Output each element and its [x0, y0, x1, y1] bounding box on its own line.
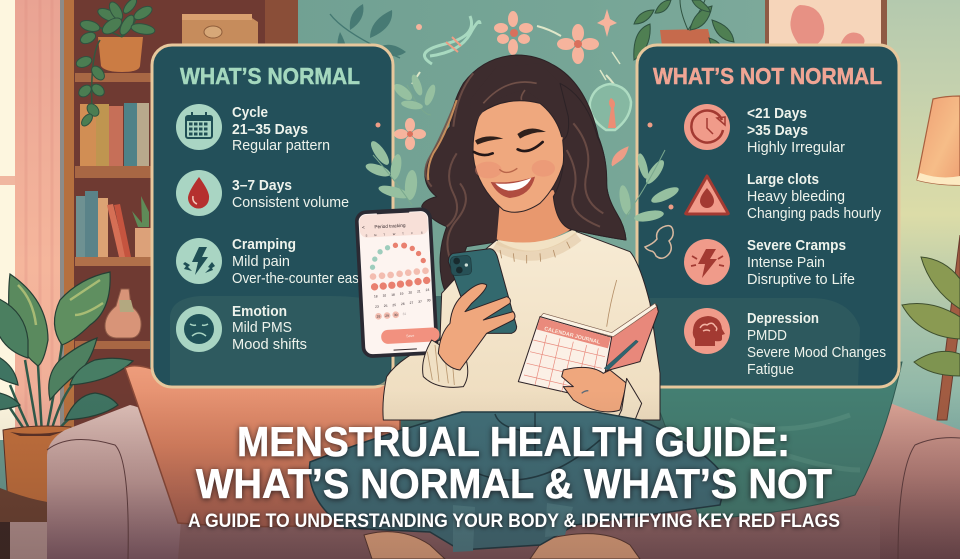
sofa	[47, 296, 960, 559]
calendar day numbers: 26	[401, 302, 405, 306]
item: depression: Fatigue	[747, 362, 794, 378]
woman	[356, 55, 660, 420]
item: short or long cycle: >35 Days	[747, 123, 808, 139]
item: depression	[684, 308, 886, 378]
wall decorations: top plant and framed picture	[634, 0, 887, 60]
uterus outline doodle	[645, 226, 673, 258]
phone with tracking app: T	[402, 232, 404, 236]
item: emotion: Mild PMS	[232, 320, 292, 336]
DNA helix	[424, 16, 480, 64]
lamp	[917, 96, 960, 420]
item: short or long cycle	[684, 104, 845, 156]
bottom darkening behind title	[0, 390, 960, 559]
right side plant	[902, 257, 960, 376]
wall botanical doodles	[330, 4, 631, 166]
closed eyes	[474, 142, 543, 155]
calendar day numbers: 25	[392, 303, 396, 307]
item: cramping: Mild pain	[232, 254, 290, 270]
flowers	[394, 9, 617, 150]
item: period length: Consistent volume	[232, 195, 349, 211]
right sprig over panel	[617, 150, 681, 224]
calendar day numbers: 27	[410, 301, 414, 305]
item: cycle	[176, 104, 330, 154]
icon: clock	[684, 104, 730, 150]
phone with tracking app: F	[411, 231, 414, 235]
top pot plant	[634, 0, 734, 60]
orange cushion	[125, 366, 400, 527]
vase	[105, 289, 141, 338]
item: cycle: Cycle	[232, 105, 268, 121]
subtitle: A GUIDE TO UNDERSTANDING YOUR BODY & IDENTIFYING KEY RED FLAGS	[188, 511, 840, 532]
phone with tracking app: M	[374, 233, 377, 237]
icon: blood drop	[176, 170, 222, 216]
item: severe cramps: Severe Cramps	[747, 238, 846, 254]
item: emotion: Mood shifts	[232, 337, 307, 353]
sweater collar	[495, 229, 577, 252]
calendar day numbers: 29	[385, 314, 389, 318]
item: cycle: Regular pattern	[232, 138, 330, 154]
icon: warning triangle with drop	[686, 176, 728, 214]
title	[196, 418, 832, 507]
calendar day numbers: 25	[384, 304, 388, 308]
nose	[499, 168, 517, 172]
icon: lightning	[176, 238, 222, 284]
title: MENSTRUAL HEALTH GUIDE:	[237, 418, 790, 465]
sofa back	[150, 296, 876, 540]
item: depression: Depression	[747, 311, 819, 327]
panel: what's not normal	[637, 45, 899, 387]
left sprig	[391, 73, 438, 115]
phone with tracking app: T	[383, 233, 386, 237]
calendar day numbers: 29	[377, 315, 381, 319]
phone held in hand	[448, 249, 517, 333]
item: emotion	[176, 304, 307, 353]
item: cramping: Cramping	[232, 237, 296, 253]
calendar day numbers: 20	[408, 291, 412, 295]
crossed legs	[309, 412, 726, 550]
leaves	[0, 272, 133, 420]
item: period length: 3–7 Days	[232, 178, 292, 194]
neck	[497, 190, 570, 245]
calendar day numbers: 19	[400, 292, 404, 296]
item: heavy bleeding: Large clots	[747, 172, 819, 188]
small arrow doodle	[612, 147, 628, 166]
item: heavy bleeding: Changing pads hourly	[747, 206, 882, 222]
panel edge doodles: sprigs, dots and uterus outline	[364, 122, 681, 258]
phone with tracking app: S	[365, 233, 368, 238]
calendar day numbers: 23	[375, 305, 379, 309]
phone with tracking app: W	[393, 232, 396, 236]
sofa left arm	[47, 405, 185, 559]
icon: bolt	[684, 239, 730, 285]
calendar ring of days	[369, 241, 426, 270]
feet	[364, 532, 640, 559]
calendar day numbers: 30	[394, 313, 398, 317]
phone with tracking app: Save	[406, 334, 414, 338]
item: severe cramps	[684, 238, 855, 288]
terracotta pot	[3, 426, 71, 505]
panel: what's normal	[152, 45, 393, 387]
left plant	[0, 272, 133, 559]
sofa seat	[120, 506, 880, 559]
top leaf sprig	[330, 4, 406, 64]
heading: what's not normal: WHAT’S NOT NORMAL	[653, 63, 882, 89]
jean cuffs	[453, 503, 573, 552]
small shelf plant	[132, 196, 151, 257]
item: short or long cycle: <21 Days	[747, 106, 807, 122]
item: cramping: Over-the-counter eas	[232, 271, 359, 287]
hair front fringe	[470, 63, 573, 140]
item: cycle: 21–35 Days	[232, 122, 308, 138]
stems	[8, 345, 75, 435]
hair strands	[425, 67, 575, 267]
calendar day numbers: 18	[391, 293, 395, 297]
lightbulb doodle	[590, 52, 631, 130]
hair right side falling over shoulder	[553, 83, 626, 240]
phone with tracking app: Period tracking	[374, 223, 406, 229]
side table	[0, 488, 70, 522]
books: middle shelf	[76, 191, 131, 257]
teal cushion	[650, 362, 902, 520]
spark lines	[412, 26, 618, 91]
calendar day numbers: 18	[374, 294, 378, 299]
calendar journal	[518, 303, 658, 400]
calendar journal: CALENDAR JOURNAL	[544, 326, 601, 346]
phone with tracking app	[356, 209, 440, 356]
item: depression: Severe Mood Changes	[747, 345, 886, 361]
item: emotion: Emotion	[232, 304, 287, 320]
icon: sad face	[176, 306, 222, 352]
phone with tracking app: <	[362, 225, 365, 230]
sofa right arm	[800, 390, 960, 559]
hanging pot plant	[75, 0, 156, 128]
jeans and feet	[309, 412, 726, 559]
icon: calendar	[176, 104, 222, 150]
item: period length	[176, 170, 349, 216]
save button	[381, 327, 440, 344]
left hand and cuff	[423, 284, 515, 387]
calendar day numbers: 10	[382, 294, 386, 298]
calendar day numbers: 37	[418, 300, 422, 304]
hair back	[422, 55, 626, 293]
title: WHAT’S NORMAL & WHAT’S NOT	[196, 460, 832, 507]
item: severe cramps: Intense Pain	[747, 255, 825, 271]
books: upper shelf	[80, 103, 149, 166]
calendar day numbers	[369, 267, 432, 320]
box on top shelf	[182, 14, 258, 48]
pen	[604, 340, 638, 370]
calendar day numbers: 31	[402, 312, 406, 316]
calendar day numbers: 30	[427, 298, 431, 302]
sweater	[383, 232, 660, 420]
item: cramping	[176, 237, 359, 287]
phone with tracking app: S	[421, 231, 423, 235]
item: heavy bleeding: Heavy bleeding	[747, 189, 845, 205]
window and curtain	[0, 0, 64, 530]
eyebrows	[475, 128, 546, 145]
icon: head with brain	[684, 308, 730, 354]
calendar day numbers: 21	[417, 289, 421, 294]
item: short or long cycle: Highly Irregular	[747, 140, 845, 156]
face	[473, 101, 570, 212]
right hand and cuff	[562, 367, 642, 420]
heading: what's normal: WHAT’S NORMAL	[180, 63, 360, 89]
smile	[491, 177, 535, 198]
calendar day numbers: 23	[426, 288, 430, 292]
item: severe cramps: Disruptive to Life	[747, 272, 855, 288]
bookshelf	[64, 0, 298, 430]
item: depression: PMDD	[747, 328, 787, 344]
item: heavy bleeding	[686, 172, 882, 222]
left sprig over panel	[364, 139, 418, 205]
